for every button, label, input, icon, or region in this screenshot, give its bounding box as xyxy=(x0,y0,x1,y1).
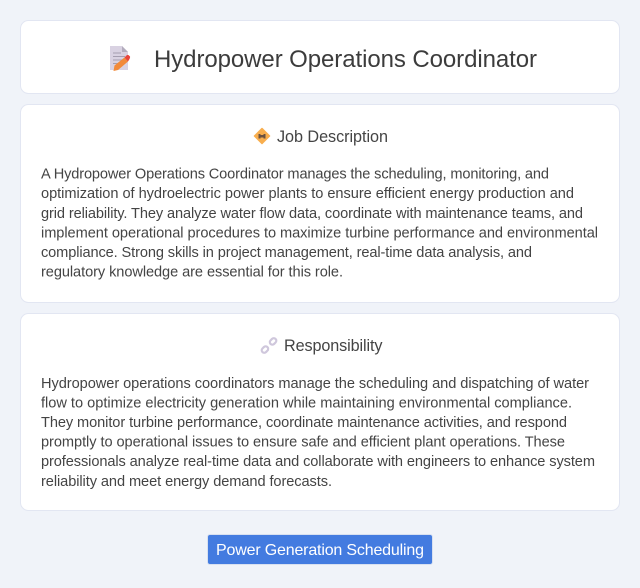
text block: job description: implement operational procedures to maximize turbine performance and environmental xyxy=(41,226,598,242)
text block: job description: A Hydropower Operations Coordinator manages the scheduling, monitoring, and xyxy=(41,166,549,182)
title text: Hydropower Operations Coordinator xyxy=(154,46,537,73)
icon: link xyxy=(261,337,277,354)
text block: responsibility xyxy=(41,376,595,490)
text block: responsibility: flow to optimize electricity generation while maintaining environmental compliance. xyxy=(41,396,572,412)
text block: responsibility: They monitor turbine performance, coordinate maintenance activities, and respond xyxy=(41,415,567,431)
panel: job description xyxy=(20,104,620,302)
text block: responsibility: reliability and meet energy demand forecasts. xyxy=(41,474,332,490)
text block: responsibility: Hydropower operations coordinators manage the scheduling and dispatching of water xyxy=(41,376,589,392)
button: power generation scheduling xyxy=(208,534,432,564)
panel: responsibility xyxy=(20,314,620,510)
text block: job description: compliance. Strong skills in project management, real-time data analysis, and xyxy=(41,245,532,261)
heading: responsibility: Responsibility xyxy=(284,337,383,355)
icon: puzzle diamond xyxy=(254,128,270,144)
text block: job description xyxy=(41,166,598,280)
icon: document with pencil xyxy=(110,46,130,71)
text block: responsibility: professionals analyze real-time data and collaborate with engineers to enhance system xyxy=(41,454,595,470)
text block: responsibility: promptly to operational issues to ensure safe and efficient plant operations. These xyxy=(41,434,565,450)
heading: job description: Job Description xyxy=(277,128,388,146)
button: power generation scheduling: Power Generation Scheduling xyxy=(216,542,424,559)
text block: job description: optimization of hydroelectric power plants to ensure efficient energy production and xyxy=(41,186,574,202)
text block: job description: regulatory knowledge are essential for this role. xyxy=(41,264,343,280)
text block: job description: grid reliability. They analyze water flow data, coordinate with maintenance teams, and xyxy=(41,206,583,222)
panel: title xyxy=(20,20,620,94)
